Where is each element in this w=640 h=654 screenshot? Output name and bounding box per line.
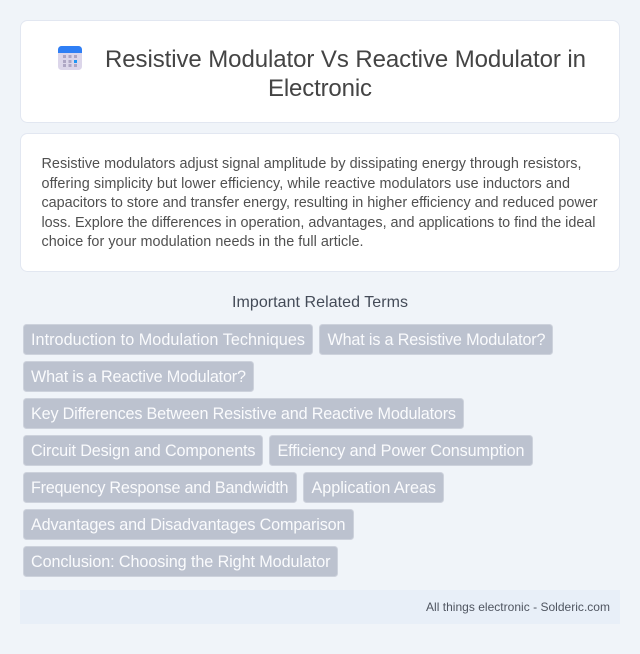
tag: reactive modulator [24,362,254,392]
heading: important related terms: Important Related Terms [232,294,408,311]
tag: introduction: Introduction to Modulation Techniques [31,331,305,349]
tag: advantages [24,510,354,540]
tag: resistive modulator: What is a Resistive Modulator? [328,331,546,349]
tag: efficiency [270,436,532,466]
tag: advantages: Advantages and Disadvantages Comparison [31,516,346,534]
panel: title card [20,20,620,122]
description text: choice for your modulation needs in the full article. [42,234,364,250]
description text [42,156,598,250]
title: Resistive Modulator Vs Reactive Modulator in [105,46,586,73]
tag: key differences [24,398,464,428]
tag: reactive modulator: What is a Reactive Modulator? [31,368,246,386]
footer [20,590,620,624]
panel: description [20,134,620,272]
tag: efficiency: Efficiency and Power Consumption [278,442,524,460]
tag: introduction [24,324,312,354]
tag: circuit design [24,436,262,466]
tag: conclusion: Conclusion: Choosing the Right Modulator [31,553,331,571]
tag: application areas: Application Areas [312,479,436,497]
tag: key differences: Key Differences Between Resistive and Reactive Modulators [31,405,456,423]
footer: All things electronic - Solderic.com [426,600,610,614]
title [105,46,586,102]
tag: circuit design: Circuit Design and Components [31,442,256,460]
description text: capacitors to store and transfer energy, resulting in higher efficiency and reduced power [42,195,598,211]
tag: conclusion [24,546,338,576]
tag: application areas [304,472,444,502]
description text: offering simplicity but lower efficiency, while reactive modulators use inductors and [42,176,570,192]
description text: loss. Explore the differences in operation, advantages, and applications to find the ideal [42,215,596,231]
title: Electronic [268,75,372,102]
panel: related term tags [24,324,552,576]
icon: calendar [58,46,82,70]
tag: resistive modulator [320,324,552,354]
description text: Resistive modulators adjust signal amplitude by dissipating energy through resistors, [42,156,582,172]
tag: frequency response: Frequency Response and Bandwidth [31,479,288,497]
tag: frequency response [24,472,296,502]
